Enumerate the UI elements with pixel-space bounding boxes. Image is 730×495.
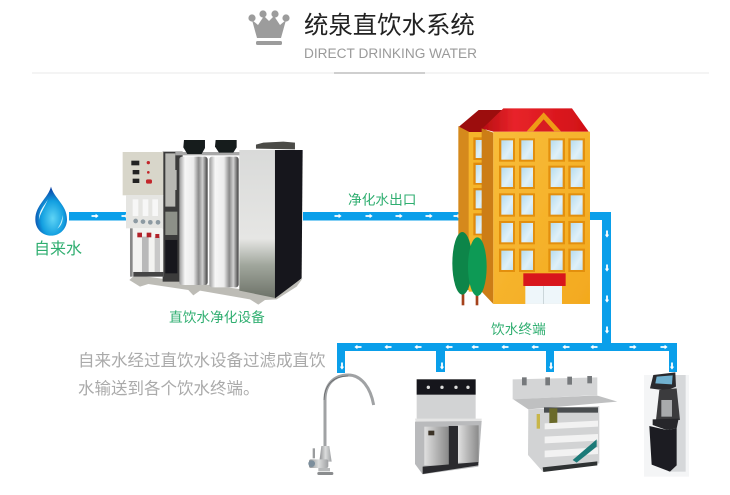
header crown icon [248,10,290,45]
rear wing [458,110,505,292]
pipe flow arrows [92,214,674,370]
subtitle: DIRECT DRINKING WATER [304,46,477,62]
terminal: steel faucet dispenser [513,376,617,472]
terminal: touchscreen dispenser [644,372,689,477]
control panel [123,152,163,195]
middle dark frame [163,152,183,282]
purifier equipment [123,140,303,305]
label: purified water outlet: 净化水出口 [348,192,416,208]
label: drinking terminals: 饮水终端 [491,322,546,337]
water pipes [69,212,677,373]
label: purifier equipment: 直饮水净化设备 [169,309,265,325]
header divider [32,72,709,74]
description text: 水输送到各个饮水终端。 [78,379,260,398]
lower filters [130,228,163,277]
description text [78,351,326,398]
icon: water drop [35,187,67,236]
window glass [501,140,583,270]
terminal: faucet [308,375,374,475]
building [452,108,590,305]
entrance door [523,273,566,304]
dormer [527,112,561,131]
description text: 自来水经过直饮水设备过滤成直饮 [78,351,326,370]
window frames [499,138,585,272]
gauge panel [126,195,163,228]
front wall [493,132,590,304]
steel tanks [175,140,240,287]
trees [452,232,487,305]
terminal: cabinet water dispenser [415,379,482,474]
side cabinet [239,142,303,298]
title: 统泉直饮水系统 [304,12,475,40]
label: tap water: 自来水 [34,240,82,258]
side wall [482,128,493,304]
roof [482,108,589,132]
base plate [129,275,303,305]
